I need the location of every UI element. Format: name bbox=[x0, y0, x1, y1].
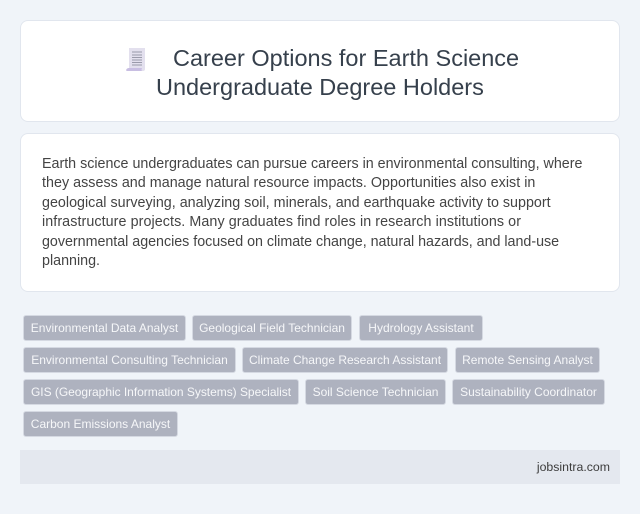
tag bbox=[455, 347, 600, 373]
description text: infrastructure projects. Many graduates find roles in research institutions or bbox=[42, 214, 521, 230]
career tags bbox=[23, 315, 605, 437]
tag: Climate Change Research Assistant bbox=[249, 353, 441, 367]
tag: Geological Field Technician bbox=[199, 321, 345, 335]
tag bbox=[452, 379, 605, 405]
tag bbox=[192, 315, 352, 341]
tag: Remote Sensing Analyst bbox=[462, 353, 593, 367]
icon: document scroll bbox=[126, 48, 145, 71]
tag bbox=[359, 315, 483, 341]
description text: they assess and manage natural resource impacts. Opportunities also exist in bbox=[42, 175, 535, 191]
description text: governmental agencies focused on climate change, natural hazards, and land-use bbox=[42, 234, 559, 250]
tag: Soil Science Technician bbox=[313, 385, 438, 399]
tag bbox=[23, 315, 186, 341]
tag: Hydrology Assistant bbox=[368, 321, 474, 335]
footer bar bbox=[20, 450, 620, 484]
panel: description bbox=[20, 133, 620, 292]
tag: Carbon Emissions Analyst bbox=[31, 417, 170, 431]
tag bbox=[305, 379, 446, 405]
description text: Earth science undergraduates can pursue careers in environmental consulting, where bbox=[42, 156, 582, 172]
panel: title card bbox=[20, 20, 620, 122]
title: Career Options for Earth Science bbox=[173, 45, 519, 71]
title bbox=[156, 45, 519, 100]
tag: Sustainability Coordinator bbox=[460, 385, 597, 399]
tag: Environmental Data Analyst bbox=[31, 321, 178, 335]
tag bbox=[23, 379, 299, 405]
description text bbox=[42, 156, 582, 269]
tag bbox=[23, 347, 236, 373]
tag: GIS (Geographic Information Systems) Specialist bbox=[31, 385, 291, 399]
tag: Environmental Consulting Technician bbox=[31, 353, 228, 367]
tag bbox=[23, 411, 178, 437]
footer source text: jobsintra.com bbox=[537, 460, 610, 474]
title: Undergraduate Degree Holders bbox=[156, 74, 484, 100]
description text: geological surveying, analyzing soil, minerals, and earthquake activity to support bbox=[42, 195, 551, 211]
description text: planning. bbox=[42, 253, 100, 269]
tag bbox=[242, 347, 448, 373]
